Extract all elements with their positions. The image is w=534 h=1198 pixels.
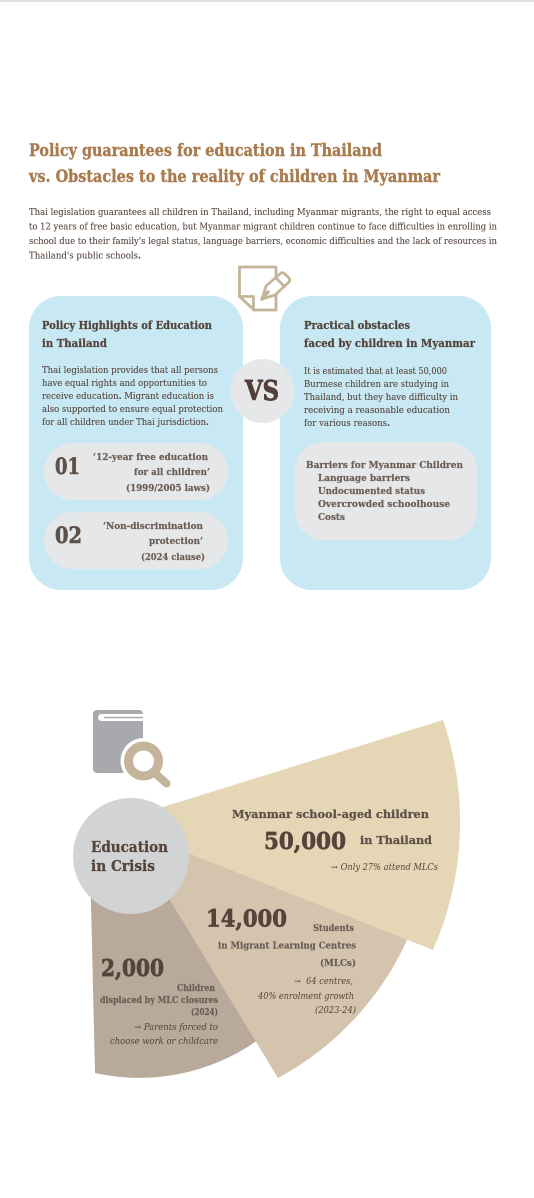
panel text: policy highlights: have equal rights and opportunities to — [42, 379, 207, 389]
panel heading: practical obstacles: Practical obstacles — [304, 319, 410, 332]
title: Policy guarantees for education in Thailand — [29, 141, 382, 161]
pill: 02 non-discrimination: 02 — [55, 523, 82, 549]
pill: 01 free education: for all children’ — [134, 467, 210, 478]
label: 50,000 children — [232, 808, 438, 873]
label: 2,000 children: 2,000 — [101, 954, 164, 982]
label: 2,000 children: choose work or childcare — [110, 1037, 218, 1047]
label: 14,000 students: 14,000 — [206, 904, 287, 932]
label: 50,000 children: 50,000 — [264, 827, 346, 855]
label: 14,000 students: (2023-24) — [315, 1005, 356, 1016]
panel text: policy highlights: Thai legislation provides that all persons — [42, 366, 218, 376]
wedge: 14,000 students — [150, 815, 408, 1078]
label: 2,000 children: displaced by MLC closures — [100, 995, 218, 1006]
panel text: practical obstacles: It is estimated that at least 50,000 — [304, 367, 447, 377]
barriers box: Overcrowded schoolhouse — [318, 499, 450, 510]
VS badge — [230, 359, 294, 423]
pill: 01 free education: 01 — [55, 454, 80, 480]
intro text block: Thailand's public schools. — [29, 252, 141, 262]
hub circle: education in crisis: in Crisis — [91, 857, 155, 875]
wedge: 50,000 children — [150, 720, 460, 950]
title — [28, 141, 441, 187]
panel text: policy highlights: for all children under Thai jurisdiction. — [42, 418, 209, 428]
barriers box: Barriers for Myanmar Children — [306, 460, 463, 471]
intro text block: school due to their family's legal status, language barriers, economic difficulties and the lack of resources in — [29, 237, 497, 247]
panel text: policy highlights: receive education. Migrant education is — [42, 392, 214, 402]
panel heading: policy highlights: Policy Highlights of Education — [42, 319, 212, 332]
label: 2,000 children: (2024) — [191, 1007, 218, 1018]
pill: 02 non-discrimination: (2024 clause) — [141, 552, 205, 563]
pill: 01 free education: (1999/2005 laws) — [126, 483, 210, 494]
panel text: practical obstacles: Burmese children are studying in — [304, 380, 449, 390]
label: 2,000 children: Children — [177, 983, 215, 994]
hub circle: education in crisis — [73, 798, 189, 914]
pill: 02 non-discrimination: ‘Non-discrimination — [103, 521, 203, 532]
panel text: practical obstacles — [304, 367, 458, 429]
panel heading: practical obstacles: faced by children in Myanmar — [304, 337, 475, 350]
label: 14,000 students: Students — [313, 923, 354, 934]
panel text: practical obstacles: receiving a reasonable education — [304, 406, 450, 416]
label: 14,000 students: → 64 centres, — [294, 977, 353, 987]
icon: book and magnifier — [93, 710, 166, 784]
panel text: policy highlights — [42, 366, 223, 428]
hub circle: education in crisis: Education — [91, 838, 168, 856]
intro text block: Thai legislation guarantees all children in Thailand, including Myanmar migrants, the right to equal access — [29, 208, 491, 218]
panel heading: policy highlights: in Thailand — [42, 337, 107, 350]
barriers box: Undocumented status — [318, 486, 425, 497]
label: 2,000 children — [100, 954, 219, 1047]
barriers box: Costs — [318, 512, 345, 523]
panel text: practical obstacles: for various reasons. — [304, 419, 390, 429]
title: vs. Obstacles to the reality of children in Myanmar — [28, 167, 441, 187]
label: 14,000 students: (MLCs) — [320, 958, 356, 969]
panel heading: policy highlights — [42, 319, 212, 350]
wedge: 2,000 children — [90, 860, 258, 1078]
label: 2,000 children: → Parents forced to — [134, 1023, 219, 1033]
icon: document and pencil — [240, 267, 290, 310]
label: 50,000 children: in Thailand — [360, 834, 432, 847]
label: 50,000 children: → Only 27% attend MLCs — [331, 863, 438, 873]
label: 14,000 students: 40% enrolment growth — [257, 992, 354, 1002]
pill: 02 non-discrimination — [44, 512, 228, 569]
barriers box — [295, 442, 477, 540]
pill: 01 free education — [44, 443, 228, 500]
intro text block — [29, 208, 497, 262]
VS badge: VS — [244, 376, 279, 407]
label: 14,000 students — [206, 904, 356, 1016]
label: 14,000 students: in Migrant Learning Centres — [218, 940, 356, 952]
pill: 02 non-discrimination: protection’ — [149, 536, 203, 547]
panel text: policy highlights: also supported to ensure equal protection — [42, 405, 223, 415]
panel: practical obstacles — [280, 296, 491, 590]
panel text: practical obstacles: Thailand, but they have difficulty in — [304, 393, 458, 403]
barriers box: Language barriers — [318, 473, 410, 484]
panel: policy highlights — [29, 296, 243, 590]
label: 50,000 children: Myanmar school-aged children — [232, 808, 429, 821]
panel heading: practical obstacles — [304, 319, 475, 350]
intro text block: to 12 years of free basic education, but Myanmar migrant children continue to face difficulties in enrolling in — [29, 222, 497, 232]
pill: 01 free education: ‘12-year free education — [93, 452, 208, 463]
